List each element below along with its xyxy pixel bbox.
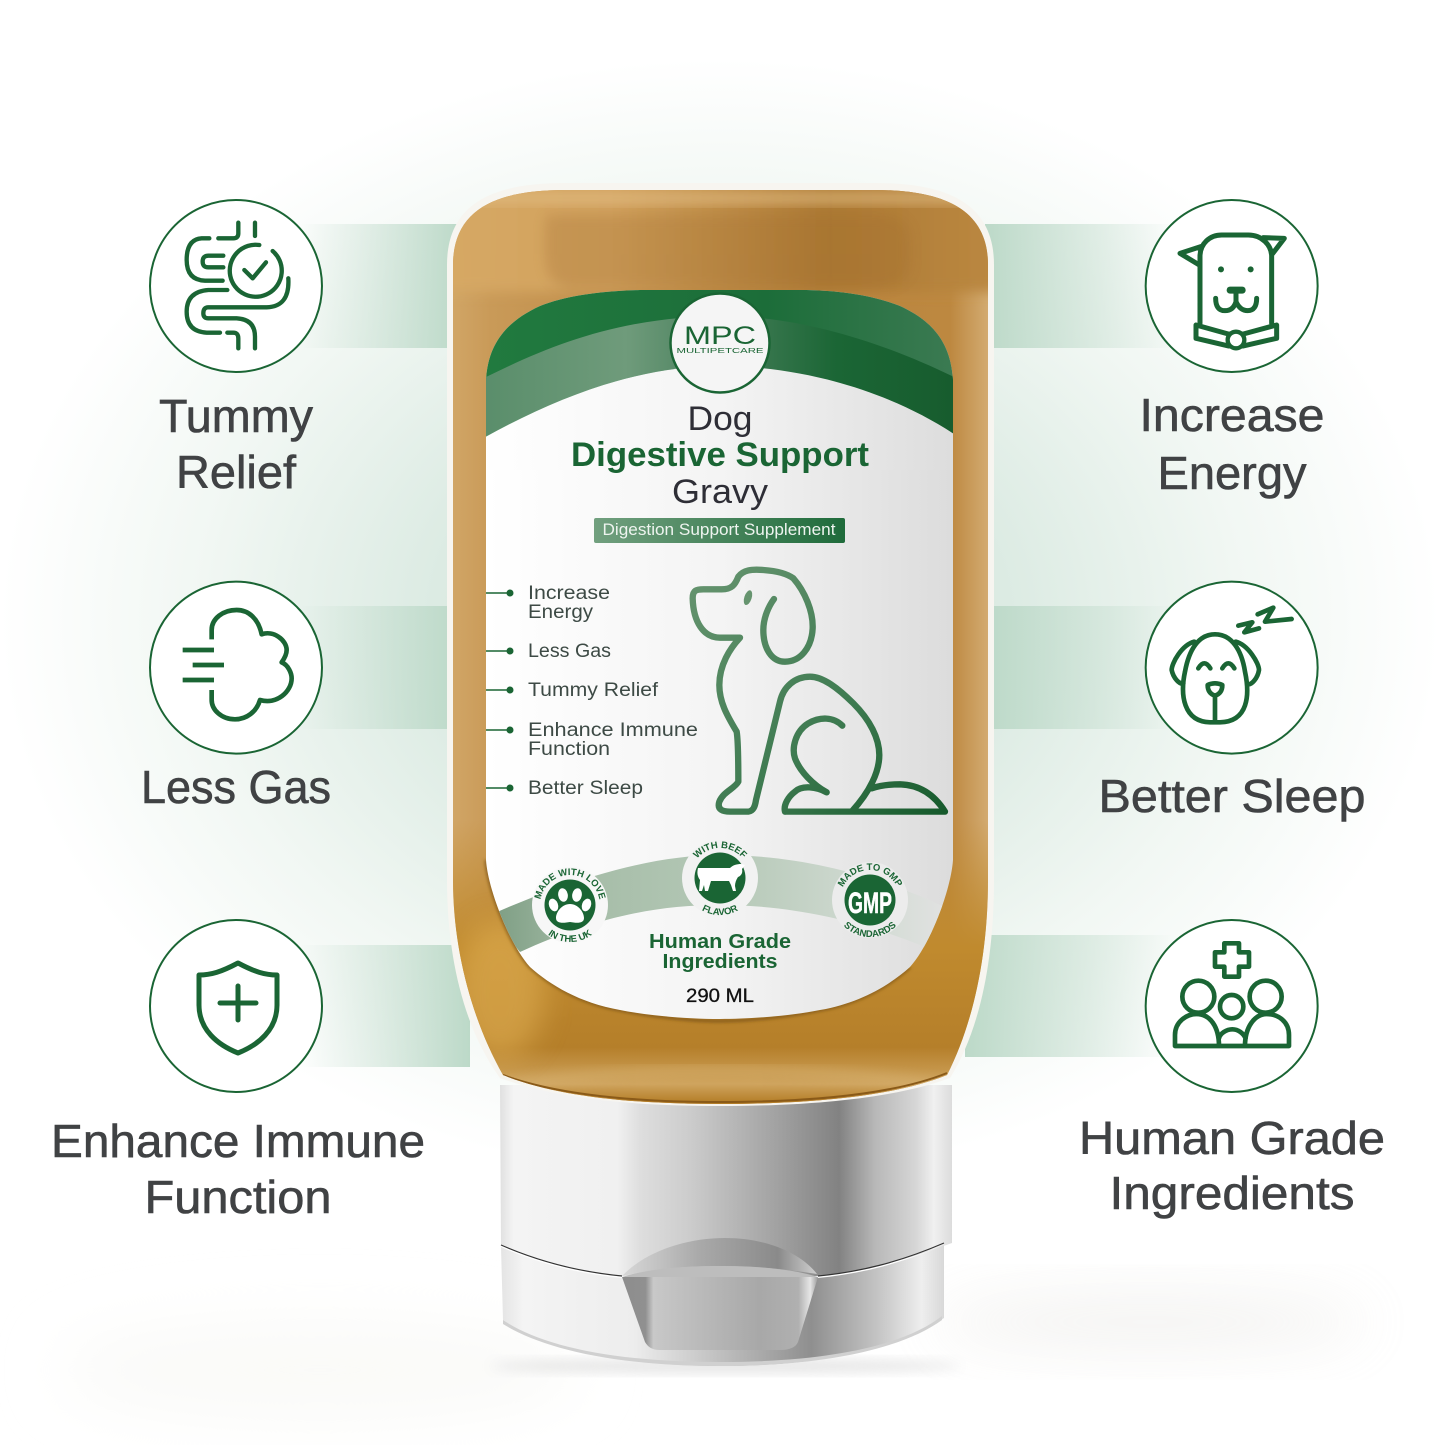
label amber edge xyxy=(486,860,910,1021)
paw icon xyxy=(547,887,593,923)
cow icon xyxy=(697,864,745,891)
label: Better Sleep xyxy=(1098,770,1366,822)
badge: made to GMP standards: MADE TO GMP xyxy=(838,863,902,887)
green band: immune function xyxy=(300,945,470,1067)
product title: Digestive Support xyxy=(571,436,869,474)
item: increase energy xyxy=(486,583,610,623)
item: tummy relief: Tummy Relief xyxy=(528,680,659,701)
brand logo xyxy=(670,294,770,392)
benefit: tummy relief xyxy=(150,200,322,498)
human grade ingredients note xyxy=(649,931,791,973)
label paper xyxy=(486,290,953,1019)
brand logo: MULTIPETCARE xyxy=(676,346,764,355)
supplement pill xyxy=(594,518,845,543)
human grade ingredients note: Ingredients xyxy=(662,951,778,973)
green band: better sleep xyxy=(985,606,1175,729)
icon: intestine with check xyxy=(150,200,322,372)
item: better sleep: Better Sleep xyxy=(528,778,643,799)
product: bottle body xyxy=(430,170,1010,1116)
badge: made with love in the UK xyxy=(532,868,608,942)
icon: gas cloud xyxy=(150,582,322,754)
label xyxy=(1140,389,1324,499)
human grade ingredients note: Human Grade xyxy=(649,931,791,953)
benefit list xyxy=(486,583,698,799)
badge: with beef flavor: FLAVOR xyxy=(702,904,738,916)
badge: made to GMP standards: STANDARDS xyxy=(844,922,896,938)
cap base rim xyxy=(503,1316,942,1366)
benefit: human grade ingredients xyxy=(1079,920,1385,1219)
label xyxy=(1079,1112,1385,1219)
label xyxy=(51,1115,425,1223)
badge: made with love in the UK: MADE WITH LOVE xyxy=(534,868,606,900)
label: Energy xyxy=(1158,447,1306,499)
flip-top thumb dome xyxy=(622,1238,817,1276)
benefit: less gas xyxy=(141,582,331,813)
cap upper section xyxy=(500,1085,952,1276)
product title xyxy=(571,400,869,511)
benefit: increase energy xyxy=(1140,200,1324,499)
icon: family with medical cross xyxy=(1146,920,1318,1092)
label: Enhance Immune xyxy=(51,1115,425,1167)
item: increase energy: Increase xyxy=(528,583,610,604)
supplement pill: Digestion Support Supplement xyxy=(602,520,836,539)
brand logo: MPC xyxy=(684,322,756,350)
volume: 290 ML xyxy=(686,986,754,1007)
green band: tummy relief xyxy=(300,224,460,348)
label: Tummy xyxy=(159,390,313,442)
badge: made to GMP standards: GMP xyxy=(848,887,892,920)
icon: shield with plus xyxy=(150,920,322,1092)
flip-top thumb tab xyxy=(622,1277,818,1350)
floor shadow xyxy=(490,1300,1370,1373)
badge: made with love in the UK: IN THE UK xyxy=(548,929,592,942)
icon: sleeping dog xyxy=(1146,582,1318,754)
benefit: enhance immune function xyxy=(51,920,425,1223)
label: Relief xyxy=(176,446,296,498)
item: enhance immune function xyxy=(486,720,698,760)
product label xyxy=(483,290,953,1024)
product title: Dog xyxy=(688,400,752,438)
badge: made to GMP standards xyxy=(832,863,908,938)
bottle outer glass rim xyxy=(447,183,994,1106)
label: Function xyxy=(144,1171,332,1223)
label bottom arc band xyxy=(499,856,942,952)
green band: increase energy xyxy=(985,224,1175,348)
item: enhance immune function: Enhance Immune xyxy=(528,720,698,741)
item: less gas: Less Gas xyxy=(528,641,611,662)
bottle amber fill xyxy=(453,190,988,1104)
item: tummy relief xyxy=(486,680,659,701)
icon: dog face with collar xyxy=(1146,200,1318,372)
label: Ingredients xyxy=(1110,1167,1354,1219)
badge: with beef flavor xyxy=(682,841,758,916)
item: less gas xyxy=(486,641,611,662)
product title: Gravy xyxy=(672,473,768,511)
label: Increase xyxy=(1140,389,1324,441)
item: enhance immune function: Function xyxy=(528,739,610,760)
label xyxy=(159,390,313,498)
green band: less gas xyxy=(300,606,460,729)
label green header xyxy=(486,290,953,437)
product: cap xyxy=(500,1085,952,1366)
badge: with beef flavor: WITH BEEF xyxy=(692,841,748,858)
item: increase energy: Energy xyxy=(528,602,594,623)
cap seam xyxy=(501,1243,944,1276)
green band: human grade xyxy=(965,935,1175,1057)
label: Human Grade xyxy=(1079,1112,1385,1164)
item: better sleep xyxy=(486,778,643,799)
label: Less Gas xyxy=(141,761,331,813)
benefit: better sleep xyxy=(1098,582,1366,822)
cap lower section xyxy=(501,1245,944,1366)
sitting dog illustration xyxy=(693,570,945,812)
